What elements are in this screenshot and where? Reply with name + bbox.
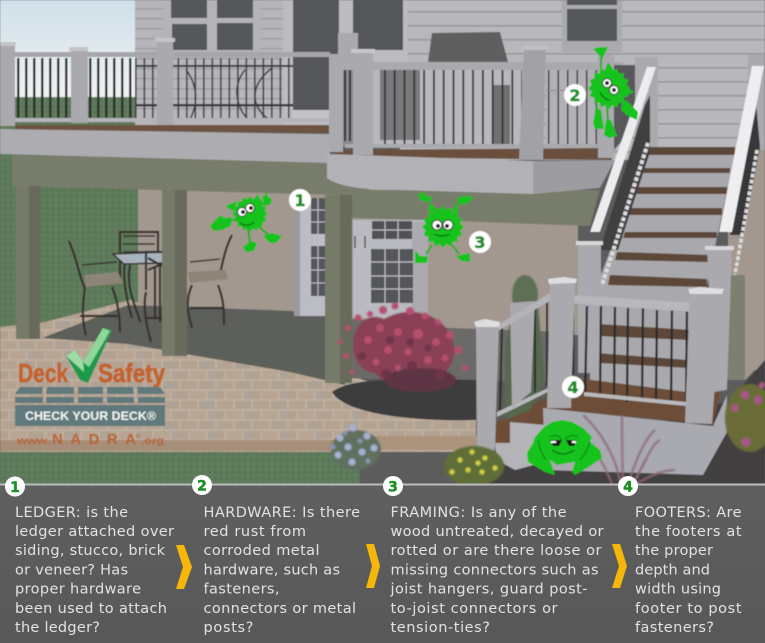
blue flower bush [330, 424, 381, 470]
badge 2 on panel [192, 475, 212, 495]
furniture [69, 232, 232, 342]
guard post front-right [685, 287, 724, 424]
upper windows and glass doors [163, 0, 622, 122]
deck floor boards [15, 125, 330, 133]
guard post lowest [474, 319, 500, 457]
bump-out deck boards [330, 148, 612, 160]
logo wordmark: Safety [98, 358, 165, 388]
column 2: hardware: hardware, such as [204, 562, 340, 578]
right stair stringer [719, 66, 765, 380]
front guard bottom rail [584, 392, 686, 406]
badge 4 on image: 4 [567, 378, 579, 397]
column 3: framing: joist hangers, guard post- [390, 582, 588, 598]
left stair stringer [590, 67, 656, 285]
column 2: hardware: fasteners, [204, 582, 280, 598]
arrow: 2 to 3 [366, 544, 380, 588]
column 1: ledger: the ledger? [15, 620, 100, 636]
stair top dark opening [614, 65, 640, 150]
column 1: ledger: LEDGER: is the [15, 505, 128, 521]
front stair box [543, 395, 727, 475]
sky [0, 0, 136, 98]
badge 3 on panel: 3 [388, 480, 398, 496]
column 2: hardware: corroded metal [204, 543, 320, 559]
under-deck beam and soffit [12, 155, 600, 226]
column 1: ledger: proper hardware [15, 582, 141, 598]
centre chair [145, 252, 164, 342]
column 3: framing: rotted or are there loose or [390, 543, 602, 559]
column 1: ledger: or veneer? Has [15, 562, 128, 578]
column 3: framing: to-joist connectors or [390, 601, 558, 617]
side guard bottom rail [497, 388, 548, 417]
side guard top rail [496, 293, 550, 332]
side guard balusters [500, 300, 547, 412]
column 1: ledger: been used to attach [15, 601, 167, 617]
left chair [69, 241, 123, 335]
left door [294, 198, 327, 316]
upper bump-out railing [343, 65, 600, 148]
badge 3 on image: 3 [474, 233, 486, 252]
column 3: framing: FRAMING: Is any of the [390, 505, 567, 521]
deck: left railing section [10, 52, 330, 122]
french door [353, 220, 428, 318]
front guard balusters [573, 305, 687, 404]
red shrub [338, 302, 468, 392]
table [113, 252, 163, 322]
yellow flower bush [444, 446, 504, 486]
column 4: footers: fasteners? [635, 620, 714, 636]
badge 3 on image [469, 231, 491, 253]
column 3: framing: missing connectors such as [390, 562, 598, 578]
badge 3 on panel [383, 476, 403, 496]
column 4: footers: footer to post [635, 601, 742, 617]
evergreen shrub [505, 275, 545, 420]
front guard top rail [570, 295, 693, 312]
support post centre front [162, 190, 187, 356]
landing newel posts [576, 241, 734, 392]
lawn [0, 97, 360, 486]
column 2: hardware: red rust from [204, 524, 306, 540]
illustration: house and deck scene [0, 0, 765, 486]
logo url: ® [136, 433, 141, 440]
logo wordmark: Deck [18, 358, 68, 388]
house siding [135, 0, 765, 160]
lower step riser [495, 422, 545, 470]
monster 3 [415, 192, 474, 263]
badge 4 on image [562, 376, 584, 398]
panel: bottom checklist [0, 475, 765, 643]
badge 2 on image [564, 84, 586, 106]
bump-out top rail [333, 62, 623, 70]
column 4: footers: width using [635, 582, 721, 598]
logo url [16, 431, 164, 448]
guard post front-left [547, 277, 577, 408]
stair newels top [635, 55, 765, 150]
covered patio shadow [42, 305, 345, 385]
main staircase [595, 147, 736, 290]
support post left [16, 186, 40, 339]
logo banner: CHECK YOUR DECK® [25, 409, 156, 423]
logo: Deck Safety [15, 328, 165, 448]
column 2: hardware: HARDWARE: Is there [204, 505, 360, 521]
bump-out fascia [327, 154, 615, 194]
monster 1 [210, 192, 282, 252]
landing deck boards [543, 379, 720, 425]
badge 1 on image: 1 [294, 191, 306, 210]
paver patio [0, 300, 480, 452]
column 3: framing [390, 505, 604, 636]
mulch beds [332, 360, 765, 484]
deck fascia [0, 129, 330, 163]
logo banner [15, 405, 165, 426]
badge 1 on panel: 1 [10, 480, 20, 496]
stucco wall [138, 185, 578, 335]
monster 2 [588, 47, 638, 138]
column 1: ledger: ledger attached over [15, 524, 174, 540]
column 4: footers [635, 505, 742, 636]
logo url: www. [16, 436, 50, 447]
arrow: 1 to 2 [176, 545, 192, 589]
column 2: hardware [204, 505, 360, 636]
deck railing posts [0, 33, 358, 130]
badge 4 on panel: 4 [623, 480, 633, 496]
logo check mark [66, 328, 112, 383]
side guard post [510, 301, 535, 408]
badge 4 on panel [618, 476, 638, 496]
right chair [188, 235, 232, 328]
logo url: .org [141, 436, 164, 447]
support post door side [325, 195, 352, 383]
bump-out posts [329, 46, 614, 160]
column 3: framing: tension-ties? [390, 620, 490, 636]
logo wordmark [18, 358, 165, 388]
monster 4 [527, 420, 602, 475]
arrow: 3 to 4 [612, 544, 627, 588]
column 3: framing: wood untreated, decayed or [390, 524, 604, 540]
column 4: footers: the footers at [635, 524, 742, 540]
column 4: footers: FOOTERS: Are [635, 505, 742, 521]
badge 1 on image [289, 189, 311, 211]
lower step boards [495, 397, 547, 443]
lower wall shadow [340, 318, 570, 382]
ornamental grass [583, 415, 675, 484]
logo url: NADRA [52, 431, 136, 448]
bump-out bottom rail [345, 144, 600, 148]
logo paver row [15, 387, 165, 403]
far chair [120, 232, 158, 318]
column 1: ledger: siding, stucco, brick [15, 543, 166, 559]
column 4: footers: depth and [635, 562, 710, 578]
right stucco wall [728, 150, 765, 370]
lower stair treads [583, 290, 700, 400]
support post centre [162, 190, 187, 356]
badge 2 on panel: 2 [197, 478, 207, 494]
column 2: hardware: connectors or metal [204, 601, 356, 617]
column 4: footers: the proper [635, 543, 713, 559]
column 1: ledger [15, 505, 174, 636]
badge 2 on image: 2 [569, 86, 581, 105]
badge 1 on panel [5, 476, 25, 496]
column 2: hardware: posts? [204, 620, 254, 636]
right flower bush [725, 382, 765, 452]
grill [428, 32, 508, 62]
